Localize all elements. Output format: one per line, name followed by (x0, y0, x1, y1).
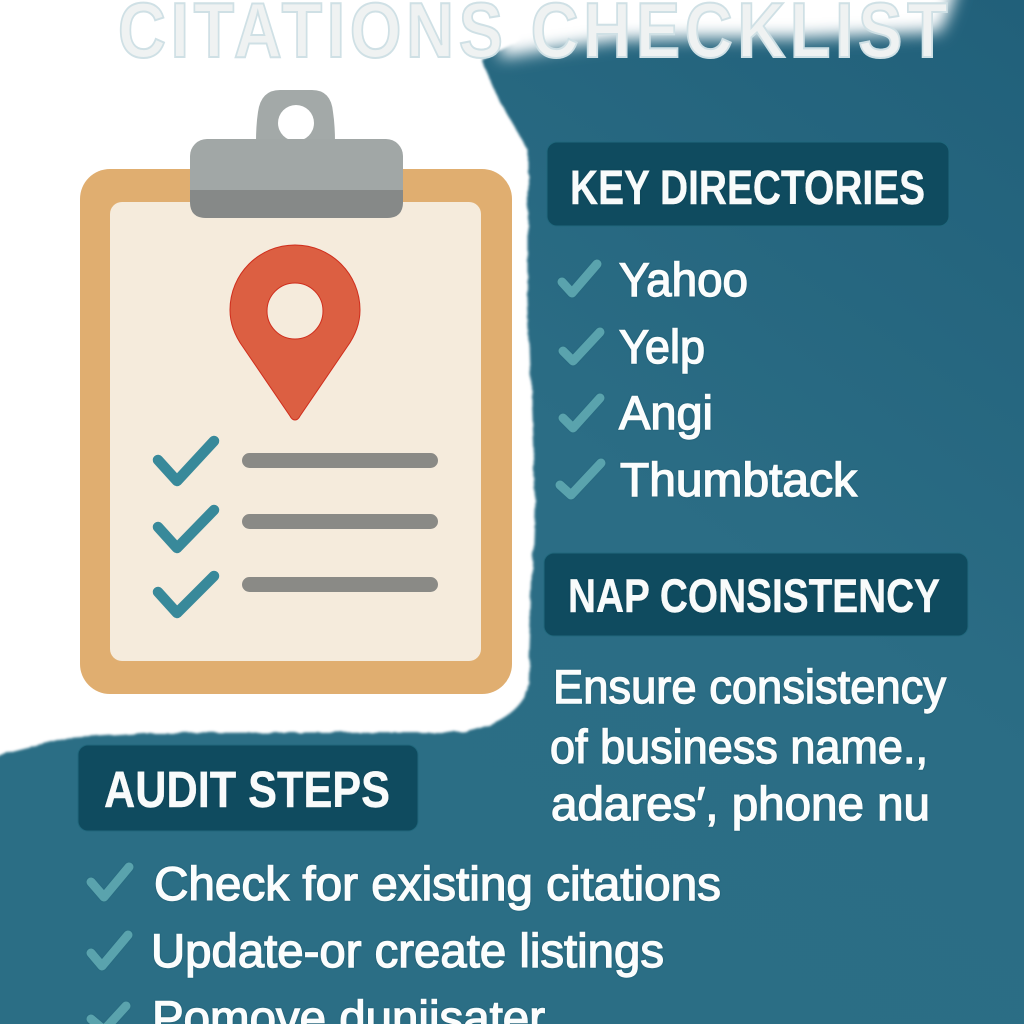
heading: key directories: KEY DIRECTORIES (570, 162, 925, 215)
torn white paper area (0, 0, 962, 760)
item: Yelp (563, 320, 705, 373)
panel: key directories (547, 142, 949, 506)
panel: audit steps (78, 745, 721, 1024)
clipboard clip (190, 90, 403, 218)
heading: audit steps: AUDIT STEPS (104, 761, 390, 818)
text block: NAP description: Ensure consistency (553, 660, 946, 713)
clipboard board (80, 169, 512, 694)
item: Thumbtack: Thumbtack (620, 453, 858, 506)
heading: NAP consistency: NAP CONSISTENCY (568, 569, 940, 622)
clipboard paper (110, 202, 481, 661)
text block: NAP description (550, 660, 946, 830)
text block: NAP description: of business name., (550, 720, 928, 773)
clipboard checklist rows (158, 441, 438, 613)
item: Yelp: Yelp (619, 320, 705, 373)
icon: location pin (230, 245, 360, 420)
item: check for existing citations: Check for existing citations (154, 857, 721, 910)
item: Angi: Angi (619, 386, 713, 439)
item: Angi (563, 386, 713, 439)
panel: NAP consistency (544, 553, 968, 830)
item: update or create listings: Update-or create listings (151, 924, 664, 977)
icon: clipboard (80, 90, 512, 694)
heading: NAP consistency (544, 553, 968, 636)
heading: audit steps (78, 745, 418, 831)
heading: key directories (547, 142, 949, 226)
item: Yahoo (562, 253, 748, 306)
item: Yahoo: Yahoo (619, 253, 748, 306)
text block: NAP description: adares′, phone nu (551, 777, 930, 830)
